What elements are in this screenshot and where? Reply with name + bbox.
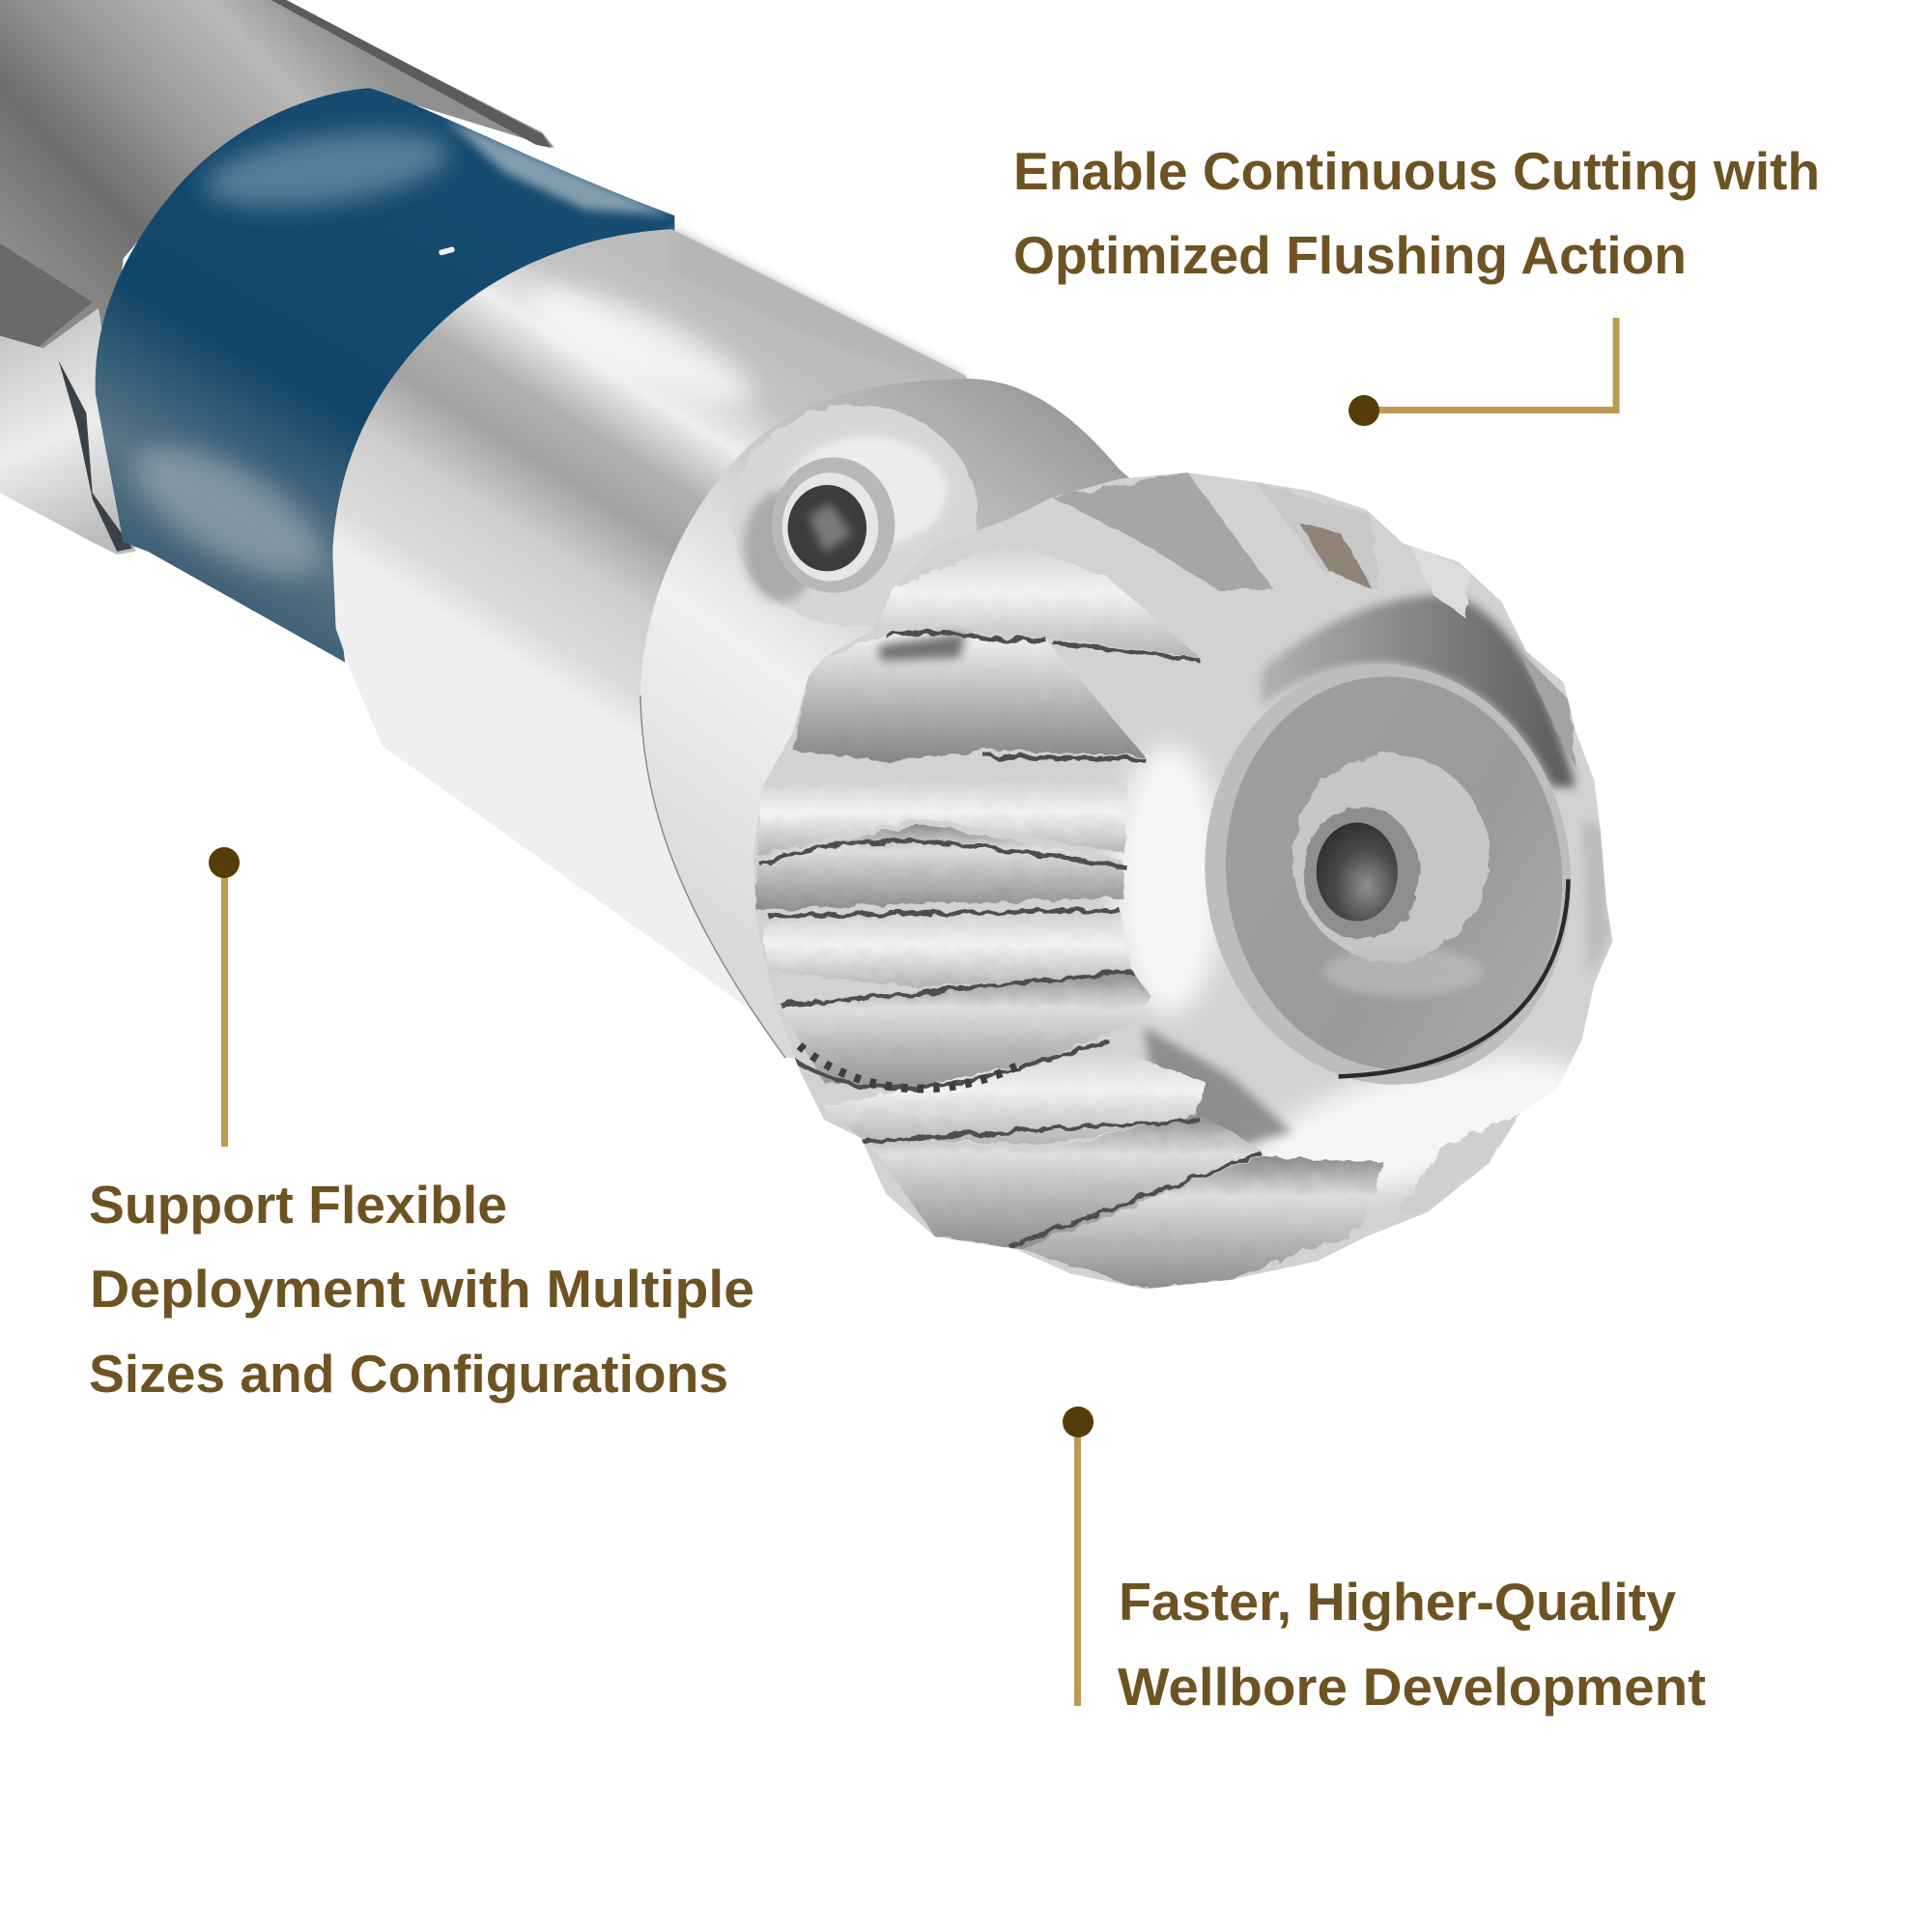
callout text xyxy=(1013,141,1820,285)
callout text xyxy=(1118,1572,1706,1717)
callout text: Support Flexible xyxy=(89,1175,507,1235)
bit end face xyxy=(640,379,1169,1063)
photo: drill bit xyxy=(0,0,1612,1289)
callout: wellbore development xyxy=(1063,1406,1706,1717)
callout: flexible deployment xyxy=(89,847,754,1404)
front steel sleeve xyxy=(332,228,1047,1047)
central bore xyxy=(1317,823,1398,922)
callout text: Faster, Higher-Quality xyxy=(1119,1572,1676,1632)
callout text: Optimized Flushing Action xyxy=(1013,225,1687,285)
leader dot xyxy=(1349,395,1379,426)
leader line xyxy=(1074,1422,1081,1706)
notch in shaft xyxy=(0,243,93,348)
rear steel shaft xyxy=(0,0,554,554)
callout text: Wellbore Development xyxy=(1118,1657,1706,1717)
callout text: Sizes and Configurations xyxy=(89,1344,728,1404)
gear head xyxy=(753,472,1612,1289)
blue painted band xyxy=(96,88,674,663)
leader dot xyxy=(1063,1406,1094,1437)
dome shading xyxy=(1114,744,1225,1015)
flushing nozzle xyxy=(731,405,979,627)
centre disc xyxy=(1178,640,1598,1108)
callout: continuous cutting xyxy=(1013,141,1820,426)
callout text xyxy=(89,1175,754,1404)
leader dot xyxy=(209,847,240,878)
callout text: Enable Continuous Cutting with xyxy=(1013,141,1820,201)
callout text: Deployment with Multiple xyxy=(90,1259,754,1319)
leader line xyxy=(1363,318,1616,410)
tooth grooves xyxy=(759,632,1262,1246)
cutter teeth xyxy=(756,472,1576,1289)
weld seam xyxy=(0,308,135,554)
leader line xyxy=(221,863,228,1147)
